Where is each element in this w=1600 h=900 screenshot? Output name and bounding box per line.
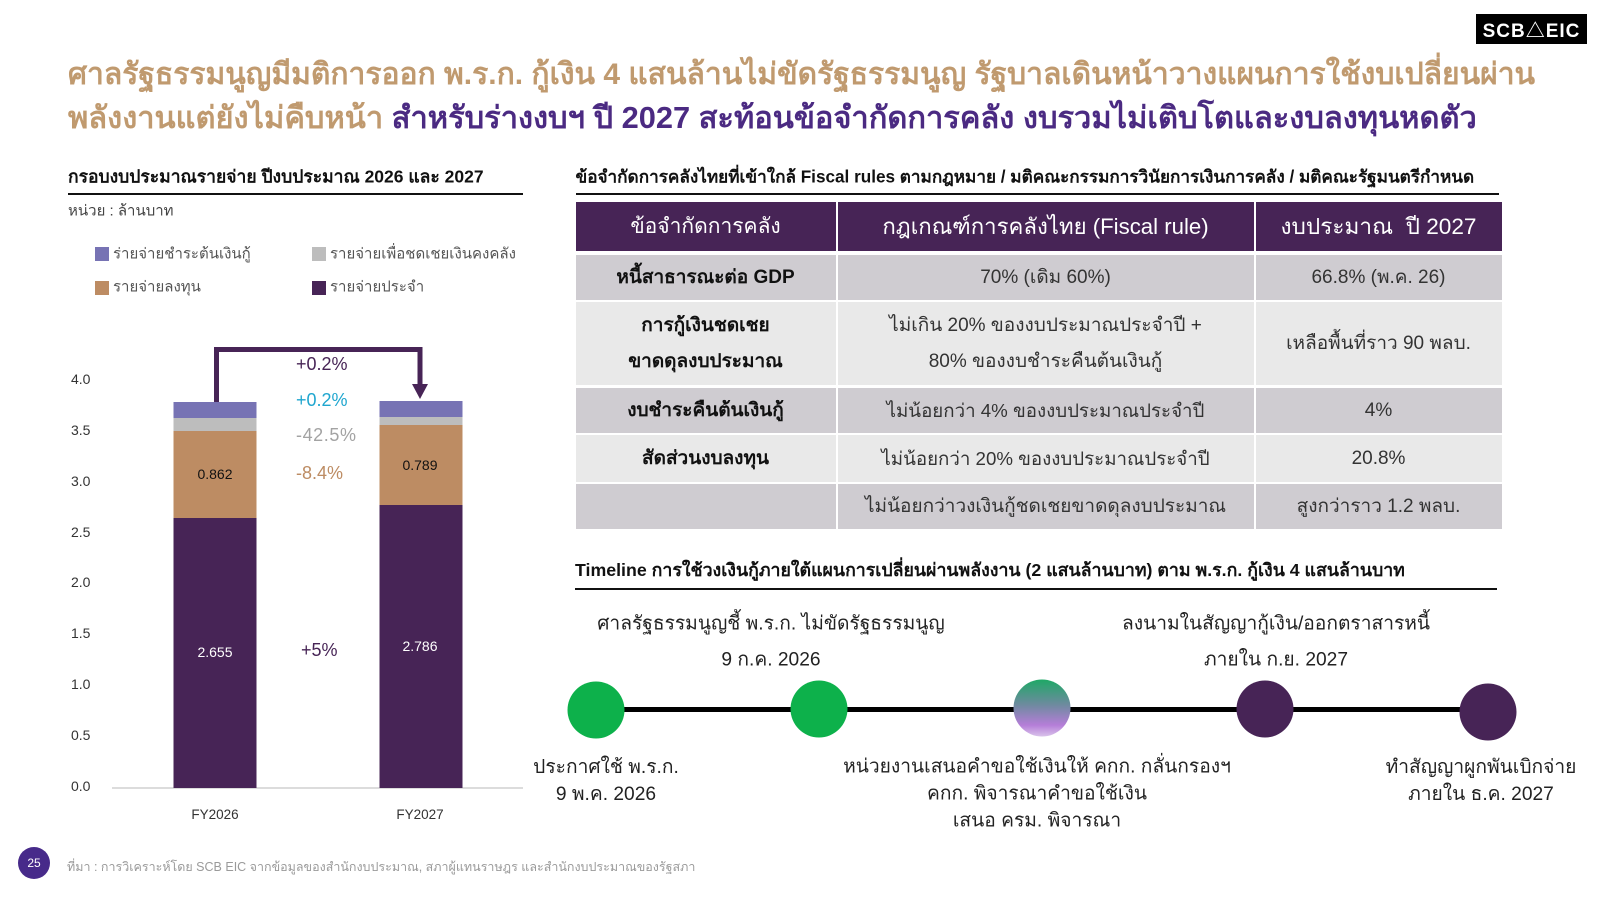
- bar: FY2026: 2.655: [197, 644, 233, 660]
- milestone 1: [568, 682, 624, 738]
- table: fiscal rules: ไม่น้อยกว่าวงเงินกู้ชดเชยขาดดุลงบประมาณ: [865, 496, 1226, 516]
- source note: ที่มา : การวิเคราะห์โดย SCB EIC จากข้อมูลของสำนักงบประมาณ, สภาผู้แทนราษฎร และสำนักงบประมาณของรัฐสภา: [67, 860, 695, 874]
- stacked bar chart: 2.0: [71, 574, 91, 590]
- milestone 2: [790, 680, 848, 738]
- table: fiscal rules: หนี้สาธารณะต่อ GDP: [616, 266, 795, 288]
- table: fiscal rules: การกู้เงินชดเชย: [641, 314, 770, 336]
- logo: SCB EIC: [1476, 14, 1587, 44]
- change labels: -42.5%: [296, 425, 356, 445]
- bar: FY2026: [174, 402, 256, 822]
- bar: FY2027: 2.786: [402, 638, 438, 654]
- label: announcement: ประกาศใช้ พ.ร.ก.: [533, 757, 679, 778]
- title: ศาลรัฐธรรมนูญมีมติการออก พ.ร.ก. กู้เงิน 4 แสนล้านไม่ขัดรัฐธรรมนูญ รัฐบาลเดินหน้าวางแผนการใช้งบเปลี่ยนผ่าน: [68, 58, 1535, 91]
- bar: FY2027: 0.789: [402, 457, 438, 473]
- chart legend: รายจ่ายลงทุน: [113, 278, 201, 296]
- label: signing: ลงนามในสัญญากู้เงิน/ออกตราสารหนี้: [1122, 613, 1430, 634]
- table: fiscal rules: เหลือพื้นที่ราว 90 พลบ.: [1286, 332, 1471, 354]
- bar: FY2026: 0.862: [197, 466, 233, 482]
- label: agencies propose: เสนอ ครม. พิจารณา: [953, 810, 1121, 832]
- date: court ruling: 9 ก.ค. 2026: [721, 649, 821, 670]
- table: fiscal rules: ข้อจำกัดการคลัง: [630, 214, 781, 238]
- stacked bar chart: 0.5: [71, 727, 91, 743]
- page number: [18, 847, 50, 879]
- table: fiscal rules: 80% ของงบชำระคืนต้นเงินกู้: [929, 350, 1162, 372]
- logo: SCB EIC: SCB△EIC: [1483, 20, 1580, 42]
- table: fiscal rules: 70% (เดิม 60%): [980, 266, 1111, 288]
- stacked bar chart: 1.0: [71, 676, 91, 692]
- table: fiscal rules: ไม่น้อยกว่า 4% ของงบประมาณประจำปี: [887, 400, 1204, 420]
- change labels: [296, 354, 356, 660]
- stacked bar chart: 0.0: [71, 778, 91, 794]
- table: fiscal rules: 4%: [1365, 400, 1392, 420]
- table: fiscal rules: งบชำระคืนต้นเงินกู้: [627, 400, 784, 420]
- label: binding contract: ภายใน ธ.ค. 2027: [1408, 784, 1554, 805]
- stacked bar chart: 2.5: [71, 524, 91, 540]
- change labels: -8.4%: [296, 463, 343, 483]
- arrow: FY2026 to FY2027: [216, 350, 428, 402]
- heading: budget framework: กรอบงบประมาณรายจ่าย ปีงบประมาณ 2026 และ 2027: [68, 166, 484, 186]
- title: [68, 52, 1535, 136]
- table: fiscal rules: [576, 202, 1502, 529]
- table: fiscal rules: 20.8%: [1352, 448, 1405, 468]
- bar: FY2027: [380, 401, 462, 822]
- table: fiscal rules: งบประมาณ ปี 2027: [1281, 214, 1476, 238]
- table: fiscal rules: ขาดดุลงบประมาณ: [628, 350, 783, 372]
- date: signing: ภายใน ก.ย. 2027: [1204, 649, 1348, 670]
- label: binding contract: ทำสัญญาผูกพันเบิกจ่าย: [1386, 757, 1576, 778]
- stacked bar chart: [71, 347, 523, 822]
- heading: timeline: Timeline การใช้วงเงินกู้ภายใต้แผนการเปลี่ยนผ่านพลังงาน (2 แสนล้านบาท) ตาม พ.ร.ก. กู้เงิน 4 แสนล้านบาท: [575, 560, 1405, 580]
- bar: FY2026: FY2026: [191, 807, 239, 822]
- milestone 4: [1236, 680, 1294, 738]
- label: announcement: [533, 756, 679, 805]
- table: fiscal rules: 66.8% (พ.ค. 26): [1311, 266, 1446, 288]
- change labels: +0.2%: [296, 390, 348, 410]
- table: fiscal rules: ไม่เกิน 20% ของงบประมาณประจำปี +: [889, 314, 1202, 336]
- change labels: +0.2%: [296, 354, 348, 374]
- label: agencies propose: [843, 752, 1231, 832]
- unit note: หน่วย : ล้านบาท: [68, 202, 174, 220]
- label: court ruling: ศาลรัฐธรรมนูญชี้ พ.ร.ก. ไม่ขัดรัฐธรรมนูญ: [597, 613, 945, 634]
- milestone 5: [1460, 684, 1516, 740]
- label: agencies propose: หน่วยงานเสนอคำขอใช้เงินให้ คกก. กลั่นกรองฯ: [843, 756, 1231, 778]
- change labels: +5%: [301, 640, 338, 660]
- chart legend: รายจ่ายเพื่อชดเชยเงินคงคลัง: [330, 246, 516, 262]
- chart legend: รายจ่ายประจำ: [330, 278, 424, 296]
- chart legend: [95, 243, 516, 296]
- stacked bar chart: 3.0: [71, 473, 91, 489]
- page number: 25: [27, 856, 41, 870]
- label: announcement: 9 พ.ค. 2026: [556, 784, 656, 805]
- stacked bar chart: 3.5: [71, 422, 91, 438]
- milestone 3: [1014, 680, 1070, 736]
- table: fiscal rules: กฎเกณฑ์การคลังไทย (Fiscal rule): [882, 214, 1209, 238]
- heading: fiscal rules: ข้อจำกัดการคลังไทยที่เข้าใกล้ Fiscal rules ตามกฎหมาย / มติคณะกรรมการวินัยการเงินการคลัง / มติคณะรัฐมนตรีกำหนด: [576, 166, 1474, 186]
- table: fiscal rules: สูงกว่าราว 1.2 พลบ.: [1297, 496, 1460, 516]
- stacked bar chart: 4.0: [71, 371, 91, 387]
- label: binding contract: [1386, 757, 1576, 805]
- table: fiscal rules: สัดส่วนงบลงทุน: [642, 448, 769, 468]
- stacked bar chart: 1.5: [71, 625, 91, 641]
- label: agencies propose: คกก. พิจารณาคำขอใช้เงิน: [927, 784, 1147, 804]
- table: fiscal rules: ไม่น้อยกว่า 20% ของงบประมาณประจำปี: [881, 448, 1210, 468]
- timeline graphic: [568, 680, 1516, 740]
- bar: FY2027: FY2027: [396, 807, 444, 822]
- title: พลังงานแต่ยังไม่คืบหน้า สำหรับร่างงบฯ ปี 2027 สะท้อนข้อจำกัดการคลัง งบรวมไม่เติบโตและงบลงทุนหดตัว: [68, 100, 1477, 135]
- chart legend: ร่ายจ่ายชำระต้นเงินกู้: [113, 246, 251, 262]
